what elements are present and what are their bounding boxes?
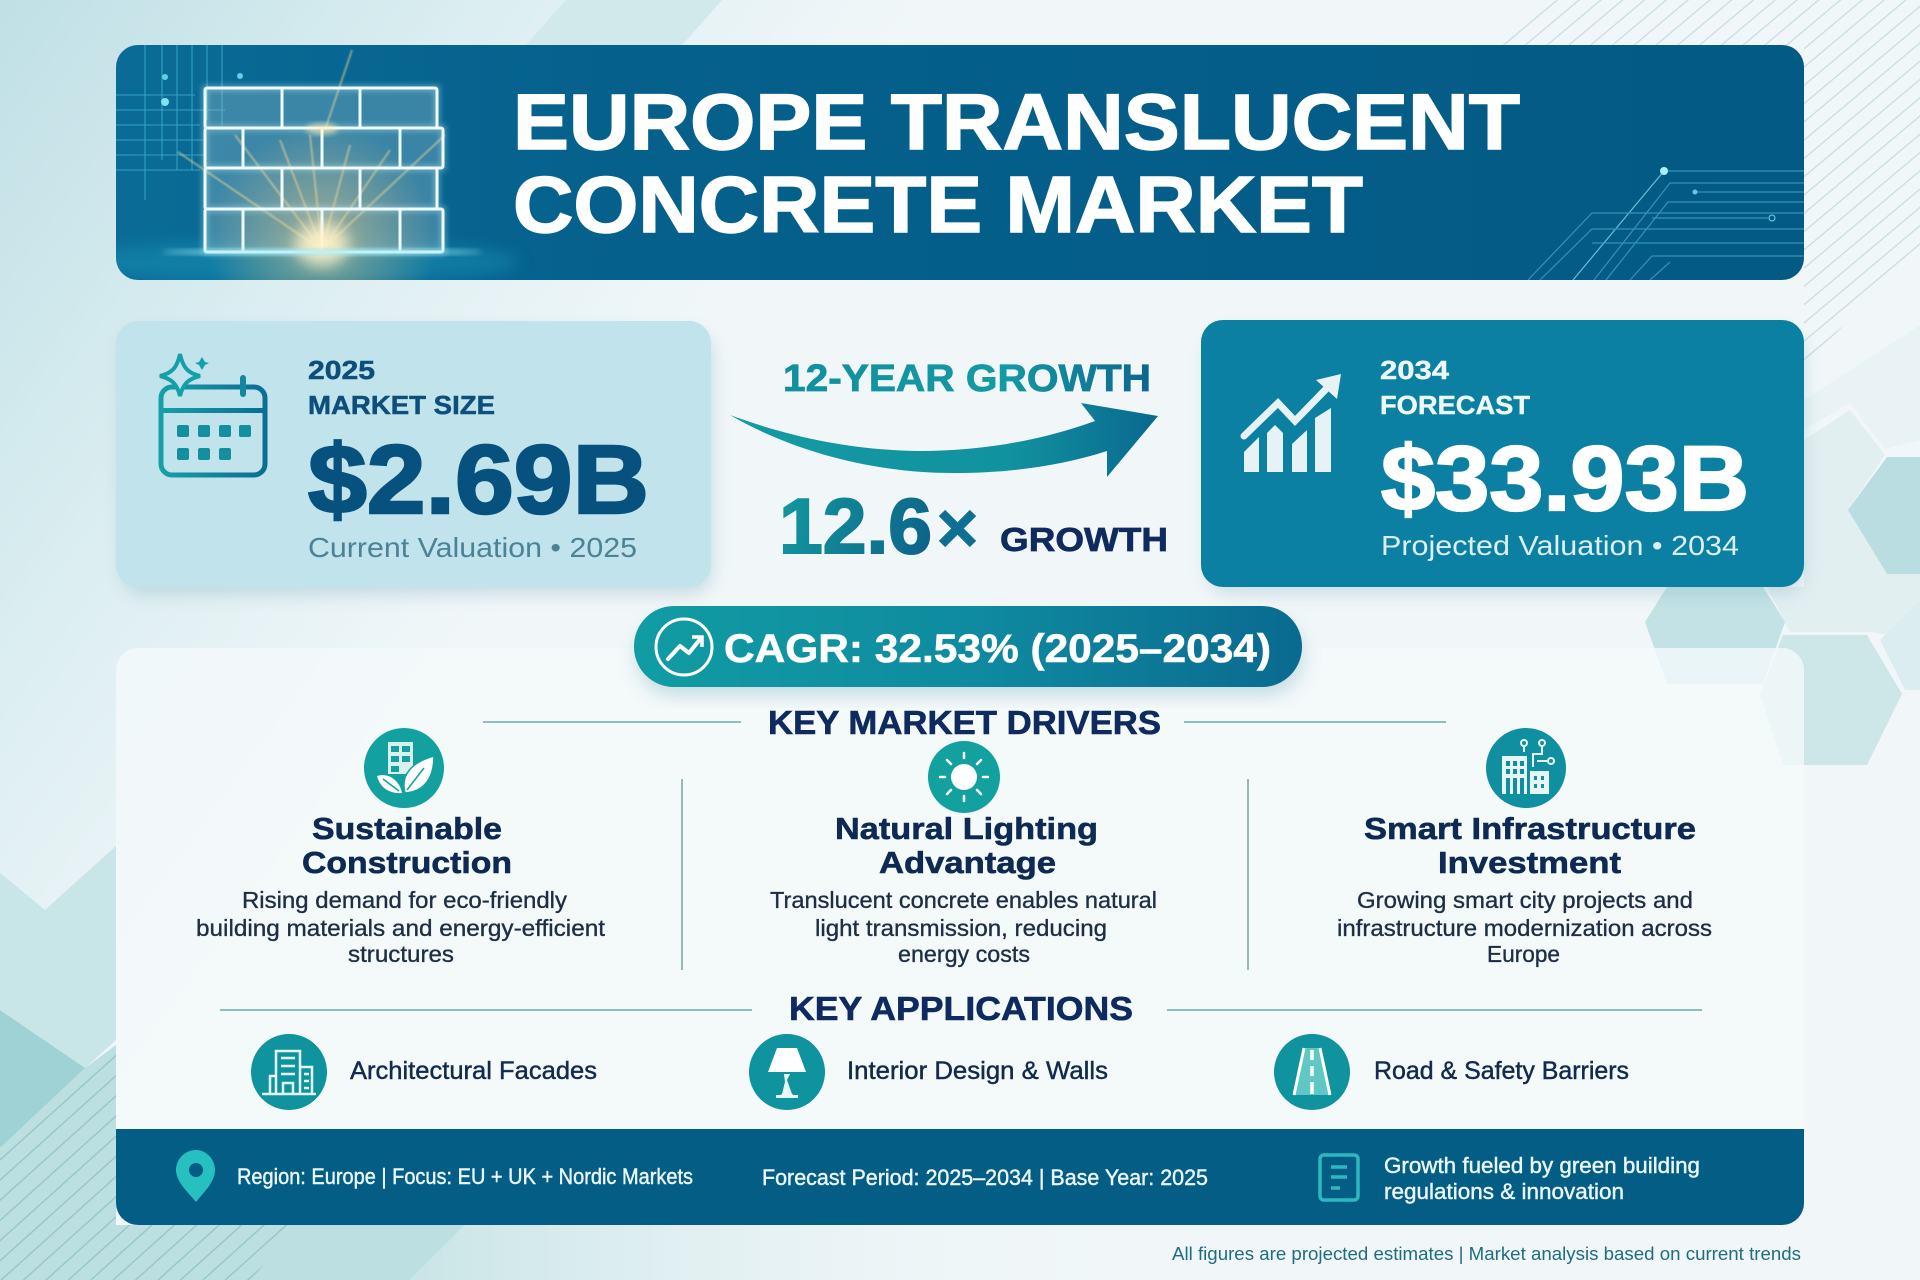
text: driver heading: Investment xyxy=(1438,845,1621,880)
icon: calendar with sparkle xyxy=(160,354,265,475)
icon: rising bar chart xyxy=(1244,374,1341,472)
text: driver description: Europe xyxy=(1487,941,1560,967)
text: 2025 market size labels xyxy=(308,355,495,420)
title: EUROPE TRANSLUCENT xyxy=(513,77,1520,166)
text: driver description xyxy=(1337,887,1712,967)
driver: smart infrastructure investment xyxy=(1337,728,1712,967)
text: 2034 forecast labels xyxy=(1380,355,1530,420)
header banner xyxy=(80,45,1804,284)
text: driver description: infrastructure modernization across xyxy=(1337,915,1712,941)
icon: sun xyxy=(928,741,1000,813)
footer bar xyxy=(116,1129,1804,1225)
text: 2025 market size labels: 2025 xyxy=(308,355,375,385)
label: Architectural Facades xyxy=(350,1057,597,1085)
icon: building and leaf xyxy=(364,728,444,808)
icon: glowing translucent brick wall xyxy=(162,49,482,280)
text: driver heading xyxy=(835,811,1098,880)
text: driver description: Growing smart city projects and xyxy=(1357,887,1693,913)
text: driver heading: Smart Infrastructure xyxy=(1364,811,1696,846)
text: driver heading: Construction xyxy=(302,845,512,880)
value: $33.93B: $33.93B xyxy=(1381,428,1749,530)
text: driver description: building materials and energy-efficient xyxy=(196,915,606,941)
text: driver heading: Sustainable xyxy=(312,811,502,846)
text: 2025 market size labels: MARKET SIZE xyxy=(308,390,495,420)
value: $2.69B: $2.69B xyxy=(308,425,649,534)
growth arrow group xyxy=(730,358,1168,570)
icon: document xyxy=(1320,1155,1358,1200)
icon: trend circle xyxy=(656,619,712,675)
icon: lamp xyxy=(749,1034,825,1110)
multiplier: 12.6x: 12.6 xyxy=(779,482,932,570)
application: architectural facades xyxy=(251,1034,597,1110)
driver: natural lighting advantage xyxy=(770,741,1157,967)
text: 2034 forecast labels: 2034 xyxy=(1380,355,1450,385)
text: region: Region: Europe | Focus: EU + UK + Nordic Markets xyxy=(237,1164,693,1189)
heading: key applications: KEY APPLICATIONS xyxy=(789,990,1133,1027)
text: growth note: Growth fueled by green building xyxy=(1384,1153,1700,1178)
panel: drivers and applications xyxy=(116,648,1804,1225)
text: driver description: light transmission, reducing xyxy=(815,915,1107,941)
text: growth note: regulations & innovation xyxy=(1384,1179,1624,1204)
icon: smart city xyxy=(1486,728,1566,808)
application: road and safety barriers xyxy=(1274,1034,1629,1110)
label: growth: GROWTH xyxy=(1000,521,1168,558)
text: growth note xyxy=(1384,1153,1700,1204)
text: driver heading: Advantage xyxy=(879,845,1056,880)
footnote: All figures are projected estimates | Market analysis based on current trends xyxy=(1172,1244,1801,1264)
icon: building xyxy=(251,1034,327,1110)
icon: multiply sign xyxy=(942,513,973,544)
application: interior design and walls xyxy=(749,1034,1108,1110)
text: driver heading xyxy=(302,811,512,880)
icon: road xyxy=(1274,1034,1350,1110)
panel: 2025 market size xyxy=(116,321,712,594)
pill: CAGR xyxy=(634,606,1304,696)
text: driver heading: Natural Lighting xyxy=(835,811,1098,846)
label: Interior Design & Walls xyxy=(847,1057,1108,1085)
text: driver heading xyxy=(1364,811,1696,880)
text: driver description: energy costs xyxy=(898,941,1030,967)
caption: current valuation: Current Valuation • 2025 xyxy=(308,532,637,563)
title xyxy=(513,77,1520,249)
value: CAGR text: CAGR: 32.53% (2025–2034) xyxy=(724,627,1271,671)
title: CONCRETE MARKET xyxy=(513,160,1363,249)
text: driver description: structures xyxy=(348,941,454,967)
text: driver description xyxy=(770,887,1157,967)
text: driver description xyxy=(196,887,606,967)
caption: projected valuation: Projected Valuation • 2034 xyxy=(1381,530,1739,561)
driver: sustainable construction xyxy=(196,728,606,967)
heading: key market drivers: KEY MARKET DRIVERS xyxy=(768,704,1161,741)
heading: 12-year growth: 12-YEAR GROWTH xyxy=(783,358,1151,400)
text: driver description: Rising demand for eco-friendly xyxy=(242,887,568,913)
text: forecast period: Forecast Period: 2025–2034 | Base Year: 2025 xyxy=(762,1165,1208,1190)
panel: 2034 forecast xyxy=(1201,320,1804,594)
icon: location pin xyxy=(176,1150,215,1202)
text: driver description: Translucent concrete enables natural xyxy=(770,887,1157,913)
arrow xyxy=(730,403,1158,477)
label: Road & Safety Barriers xyxy=(1374,1057,1629,1085)
text: 2034 forecast labels: FORECAST xyxy=(1380,390,1530,420)
